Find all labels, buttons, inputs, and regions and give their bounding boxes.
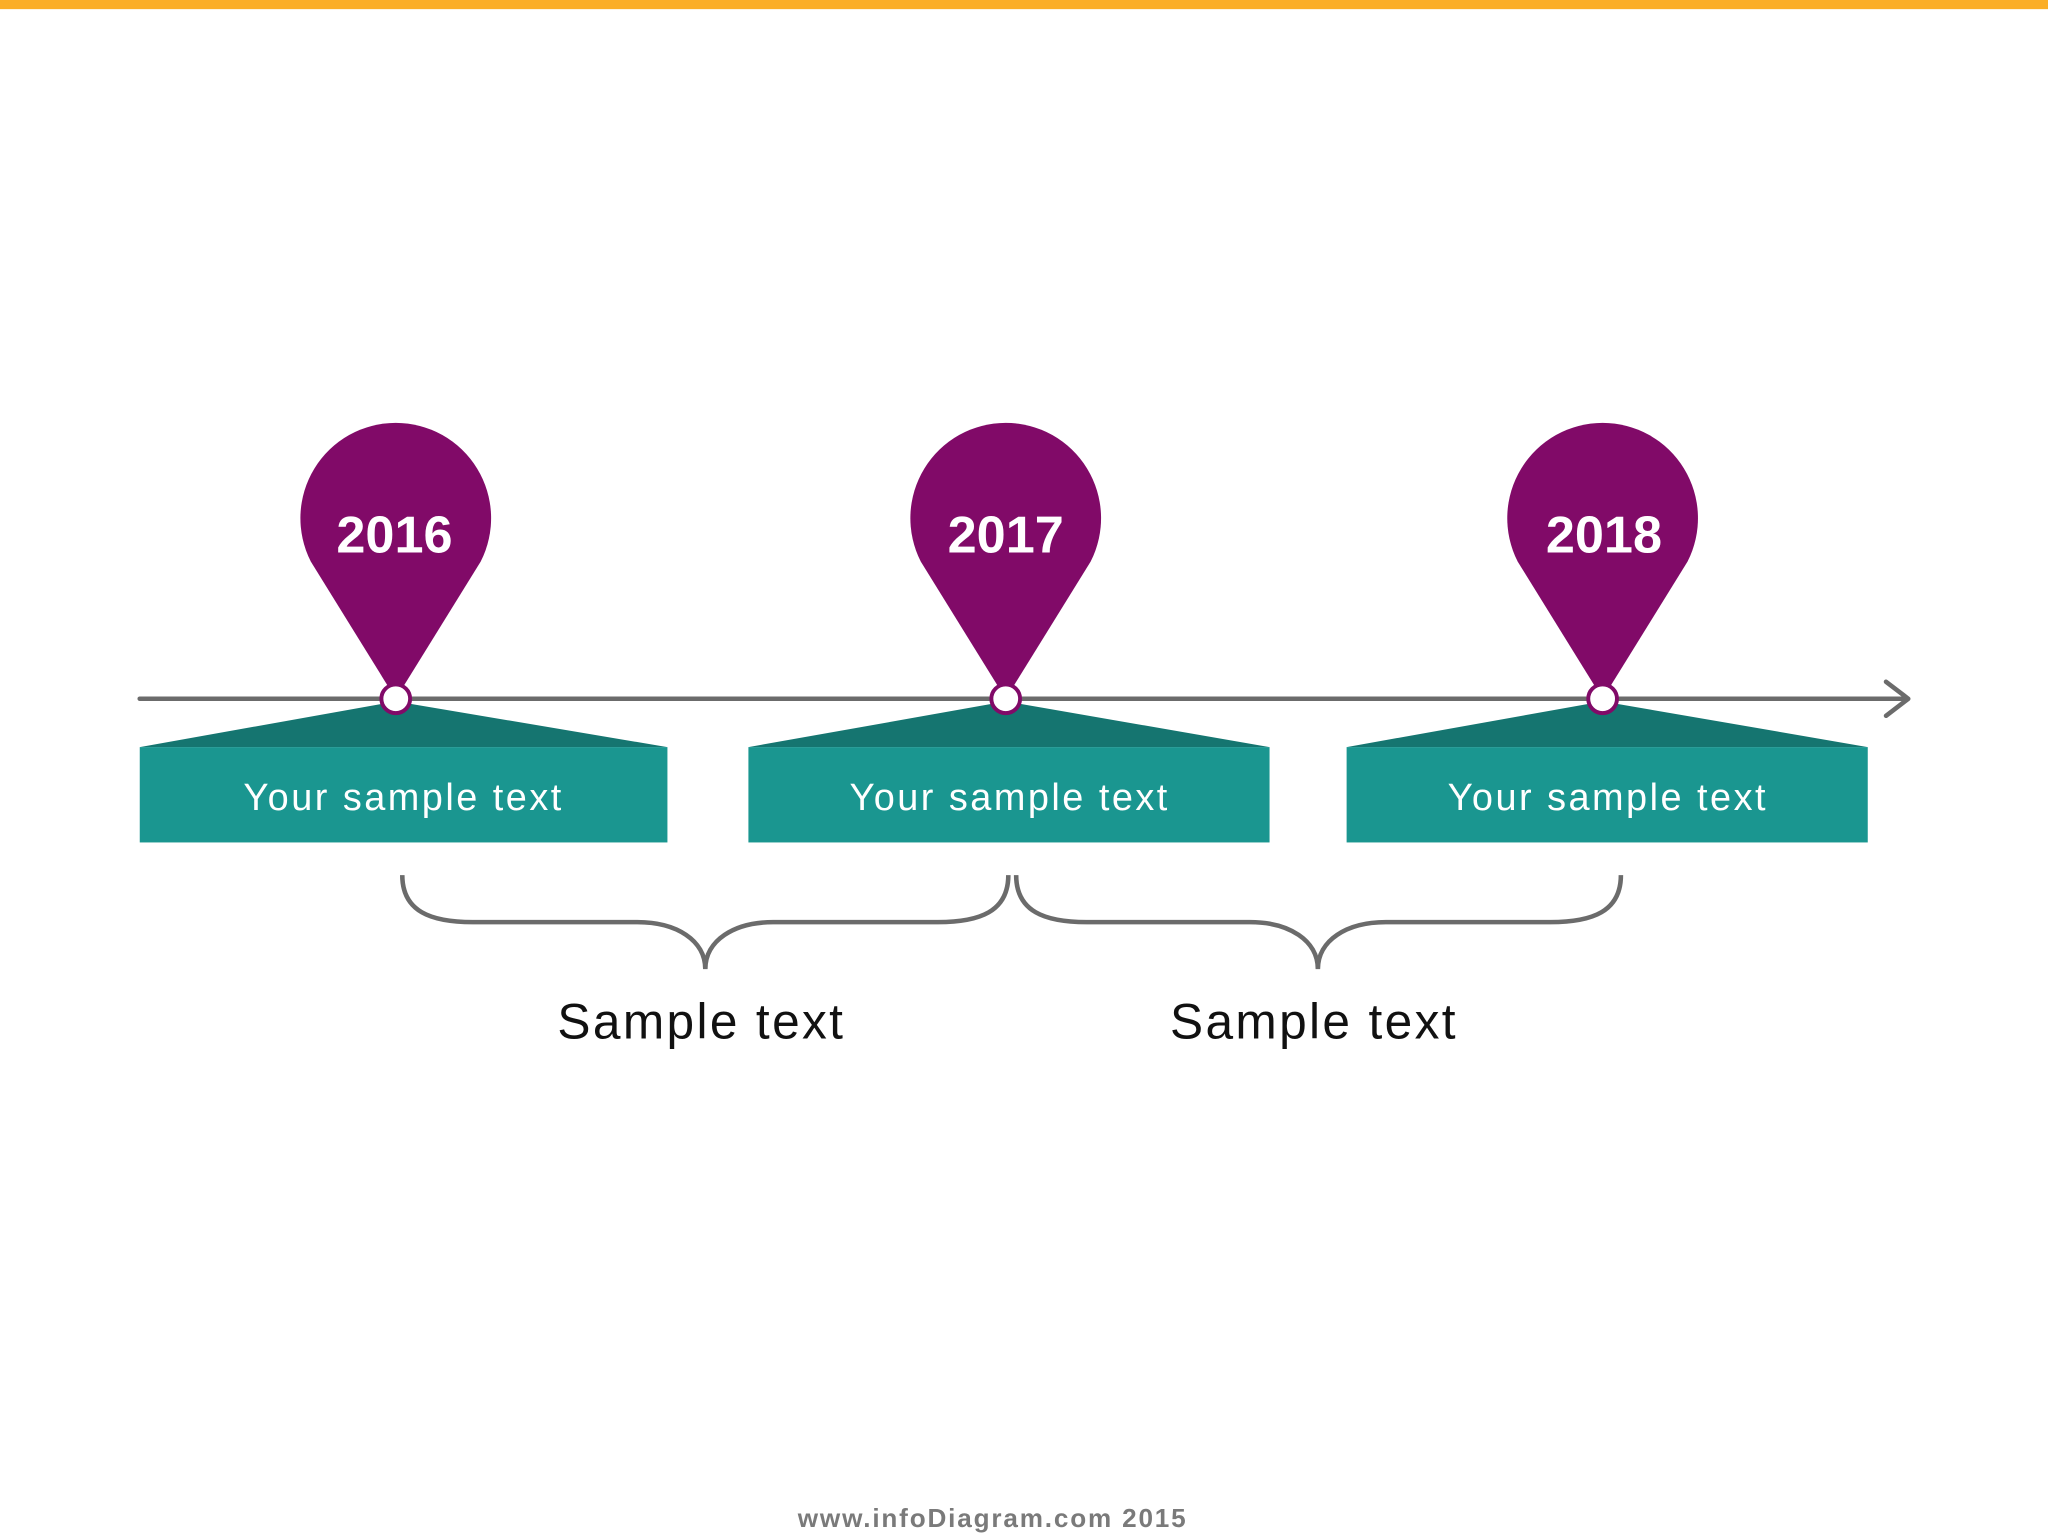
milestone 2016: 2016: [336, 506, 453, 564]
milestone 2016: [140, 423, 667, 842]
footer: www.infoDiagram.com 2015: [797, 1503, 1188, 1533]
milestone 2018: [1347, 423, 1868, 842]
timeline arrow: [140, 682, 1908, 716]
milestone 2017: Your sample text: [849, 777, 1170, 819]
milestone 2018: Your sample text: [1448, 777, 1768, 819]
top bar: [0, 0, 2048, 9]
brace 2 with label: Sample text: [1170, 993, 1458, 1049]
milestone 2017: [748, 423, 1270, 842]
milestone 2017: 2017: [948, 506, 1064, 564]
brace 1 with label: Sample text: [557, 993, 845, 1049]
brace 1 with label: [402, 875, 1008, 1049]
brace 2 with label: [1016, 875, 1621, 1049]
milestone 2018: 2018: [1546, 506, 1662, 564]
milestone 2016: Your sample text: [243, 777, 564, 819]
